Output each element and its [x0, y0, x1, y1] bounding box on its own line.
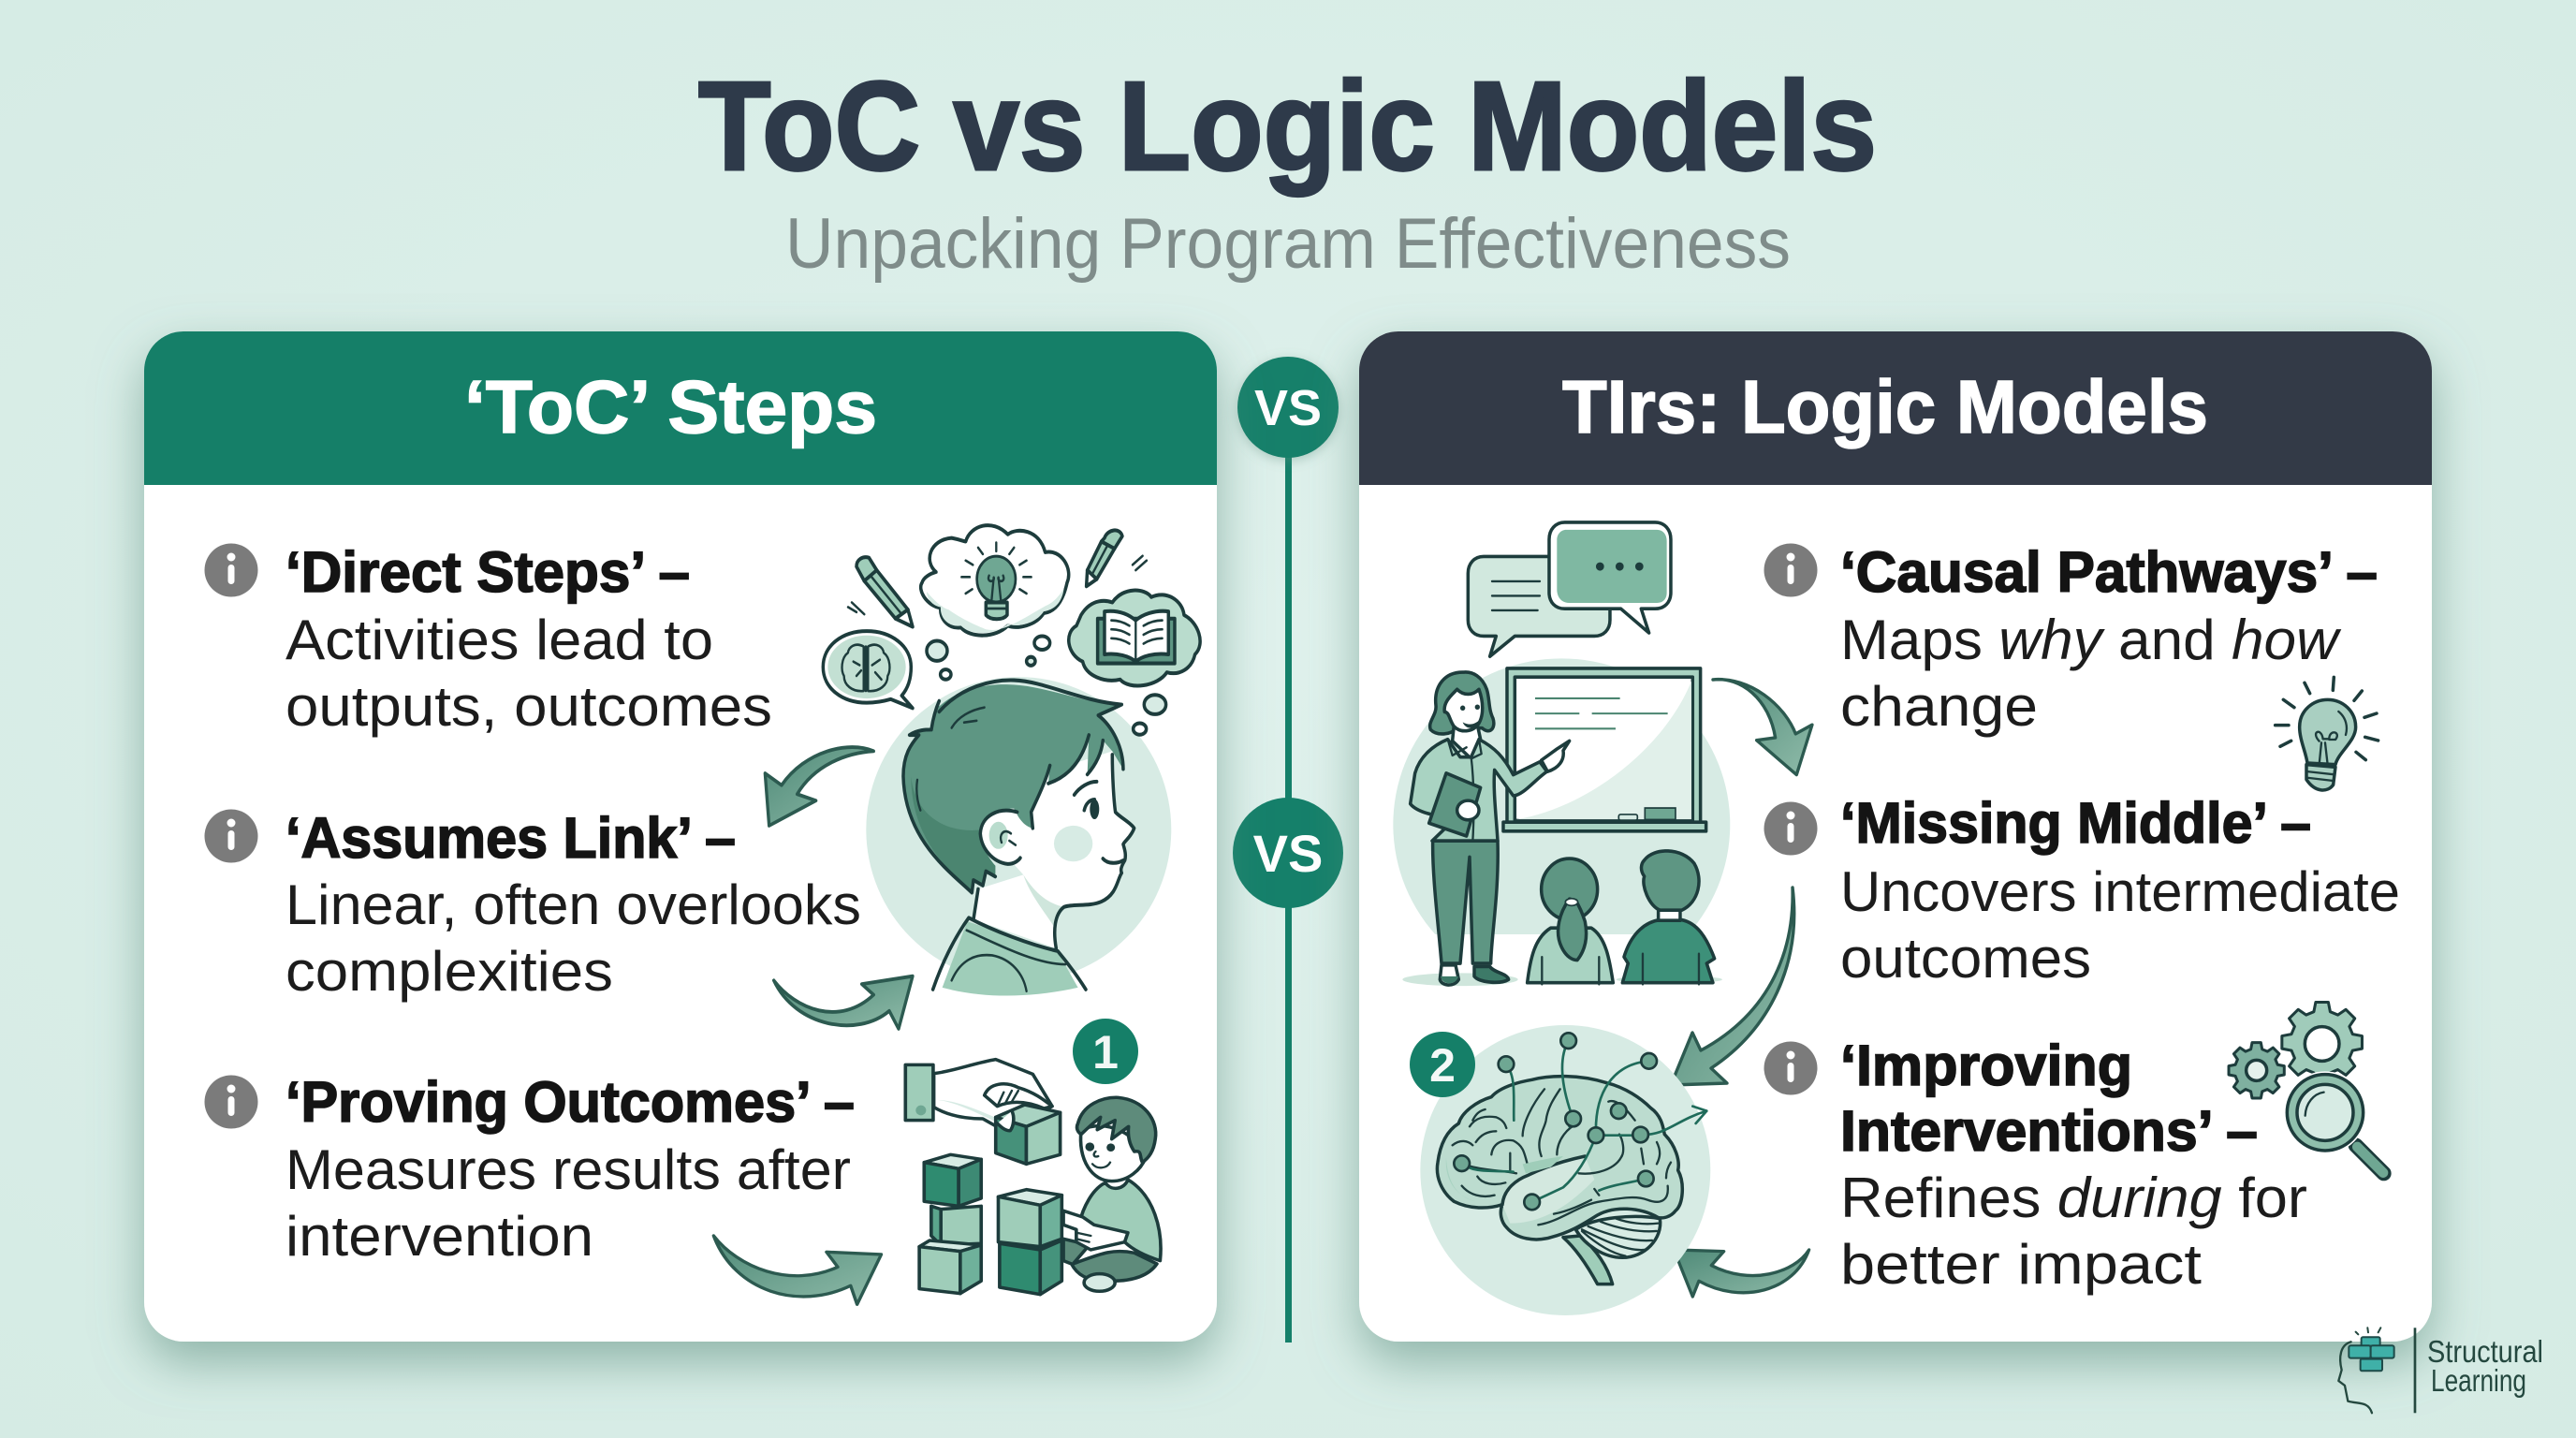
VS badge top: [1237, 357, 1339, 458]
item: Assumes Link: complexities: [285, 940, 613, 1003]
arrow: down to brain: [1671, 888, 1794, 1085]
item: Causal Pathways: [1764, 540, 2378, 738]
number badge 1: [1073, 1019, 1138, 1084]
illustration: boy thinking: [823, 525, 1200, 996]
VS badge middle: [1233, 798, 1343, 908]
item: Improving Interventions: [1764, 1034, 2307, 1296]
item: Proving Outcomes: intervention: [285, 1205, 593, 1268]
item: Direct Steps: ‘Direct Steps’ –: [285, 540, 690, 604]
VS badge middle: VS: [1253, 824, 1323, 883]
arrow: up to brain: [1674, 1250, 1809, 1297]
number badge 2: [1410, 1032, 1475, 1097]
item: Missing Middle: ‘Missing Middle’ –: [1840, 791, 2311, 855]
logo: Structural Learning: [2338, 1328, 2543, 1413]
arrow: towards boy: [774, 976, 913, 1029]
item: Direct Steps: Activities lead to: [285, 609, 713, 671]
item: Improving Interventions: Interventions’ –: [1840, 1099, 2258, 1163]
item: Missing Middle: Uncovers intermediate: [1840, 860, 2400, 923]
arrow: towards blocks: [713, 1236, 881, 1304]
item: Improving Interventions: ‘Improving: [1840, 1034, 2132, 1097]
title: ToC vs Logic Models: [698, 55, 1877, 197]
item: Assumes Link: ‘Assumes Link’ –: [285, 806, 736, 870]
item: Causal Pathways: change: [1840, 675, 2038, 738]
icon: light bulb: [2276, 677, 2378, 790]
item: Causal Pathways: ‘Causal Pathways’ –: [1840, 540, 2378, 604]
illustration: teacher and students: [1393, 522, 1730, 986]
panel: Logic models: [1359, 331, 2432, 1342]
logo: Structural Learning: Learning: [2431, 1363, 2526, 1398]
item: Proving Outcomes: ‘Proving Outcomes’ –: [285, 1070, 855, 1134]
logo: Structural Learning: Structural: [2427, 1334, 2543, 1369]
header bar: ToC steps: [144, 331, 1217, 485]
icon: gears and magnifier: [2229, 1003, 2384, 1173]
header bar: Logic models: TIrs: Logic Models: [1562, 365, 2208, 448]
panel: ToC steps: [144, 331, 1217, 1342]
vertical divider line: [1285, 407, 1292, 1343]
item: Missing Middle: [1764, 791, 2400, 990]
item: Assumes Link: [204, 806, 861, 1003]
item: Proving Outcomes: Measures results after: [285, 1138, 851, 1201]
item: Assumes Link: Linear, often overlooks: [285, 873, 861, 936]
arrow: to Assumes Link: [765, 747, 873, 826]
item: Improving Interventions: Refines during for: [1840, 1167, 2307, 1229]
item: Causal Pathways: Maps why and how: [1840, 609, 2342, 671]
item: Direct Steps: [204, 540, 772, 738]
item: Improving Interventions: better impact: [1840, 1233, 2202, 1296]
item: Proving Outcomes: [204, 1070, 855, 1268]
header bar: ToC steps: ‘ToC’ Steps: [464, 365, 877, 448]
item: Direct Steps: outputs, outcomes: [285, 675, 772, 738]
arrow: board to Missing Middle: [1713, 680, 1812, 775]
VS badge top: VS: [1254, 380, 1322, 436]
number badge 1: 1: [1092, 1026, 1119, 1078]
header bar: Logic models: [1359, 331, 2432, 485]
number badge 2: 2: [1429, 1039, 1456, 1092]
illustration: brain pathways: [1420, 1025, 1710, 1315]
item: Missing Middle: outcomes: [1840, 927, 2091, 990]
subtitle: Unpacking Program Effectiveness: [785, 204, 1791, 284]
illustration: child building blocks: [905, 1060, 1161, 1295]
